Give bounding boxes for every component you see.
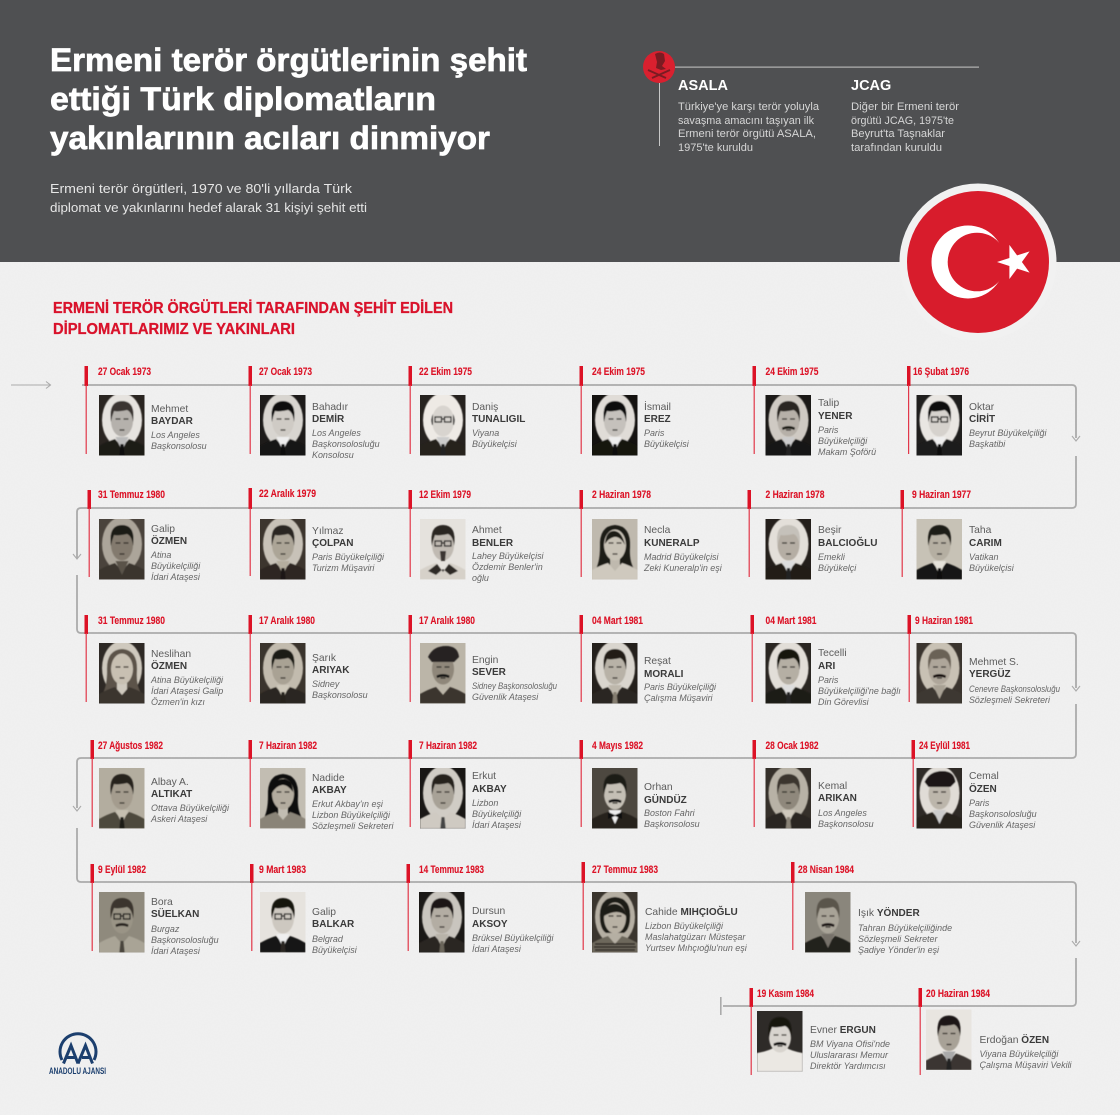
entry: Orhan Gündüz: 4 Mayıs 1982 — [592, 740, 643, 752]
entry: Galip Balkar: 9 Mart 1983 — [259, 864, 306, 876]
entry: Şarık Arıyak: Başkonsolosu — [312, 690, 368, 700]
entry: Erdoğan Özen: Viyana Büyükelçiliği — [980, 1049, 1059, 1059]
entry: Dursun Aksoy — [406, 864, 554, 954]
entry: Orhan Gündüz — [580, 740, 700, 829]
photo: Evner Ergun — [757, 1011, 802, 1072]
entry: Albay A. Altıkat: ALTIKAT — [151, 789, 192, 800]
entry: Işık Yönder: Işık YÖNDER — [858, 906, 920, 919]
entry: Talip Yener: Büyükelçiliği — [818, 436, 868, 446]
title: Ermeni terör örgütlerinin şehit — [50, 42, 527, 78]
entry: Engin Sever: Engin — [472, 655, 499, 666]
entry: Ahmet Benler: Lahey Büyükelçisi — [472, 551, 545, 561]
entry: Işık Yönder: 28 Nisan 1984 — [798, 864, 855, 876]
text: JCAG: tarafından kuruldu — [851, 142, 942, 154]
entry: Erkut Akbay: Lizbon — [472, 798, 498, 808]
entry: Taha Carım: CARIM — [969, 538, 1002, 549]
entry: Necla Kuneralp — [580, 489, 723, 580]
entry: Bora Süelkan: 9 Eylül 1982 — [98, 864, 146, 876]
icon: ASALA emblem — [643, 51, 675, 83]
entry: Talip Yener: Makam Şoförü — [818, 447, 876, 457]
entry: Dursun Aksoy: İdari Ataşesi — [472, 944, 522, 954]
heading: section title: DİPLOMATLARIMIZ VE YAKINLARI — [53, 320, 295, 338]
entry: Taha Carım — [900, 489, 1015, 580]
entry: Yılmaz Çolpan: Yılmaz — [312, 526, 343, 537]
entry: Galip Balkar: Galip — [312, 907, 336, 918]
text: ASALA: 1975'te kuruldu — [678, 142, 753, 154]
photo: Ahmet Benler — [420, 519, 466, 580]
entry: Erdoğan Özen: Erdoğan ÖZEN — [980, 1033, 1049, 1046]
entry: Mehmet S. Yergüz: Sözleşmeli Sekreteri — [969, 695, 1051, 705]
photo: Erkut Akbay — [420, 766, 466, 828]
photo: Dursun Aksoy — [419, 890, 464, 952]
photo: Bahadır Demir — [260, 393, 306, 456]
entry: Mehmet S. Yergüz: 9 Haziran 1981 — [915, 615, 973, 627]
subtitle — [50, 181, 367, 215]
photo: İsmail Erez — [592, 393, 638, 456]
entry: Cahide Mıhçıoğlu — [582, 862, 748, 953]
entry: Cahide Mıhçıoğlu: Yurtsev Mıhçıoğlu'nun eşi — [645, 943, 748, 953]
text: ASALA: Ermeni terör örgütü ASALA, — [678, 128, 816, 140]
entry: Mehmet S. Yergüz: YERGÜZ — [969, 667, 1011, 680]
entry: Neslihan Özmen: 31 Temmuz 1980 — [98, 615, 165, 627]
entry: Engin Sever — [408, 615, 557, 704]
entry: Bora Süelkan: Bora — [151, 897, 173, 908]
entry: Nadide Akbay: Sözleşmeli Sekreteri — [312, 821, 394, 831]
entry: Albay A. Altıkat: Askeri Ataşesi — [150, 814, 208, 824]
entry: Oktar Cirit: Başkatibi — [969, 439, 1006, 449]
entry: Ahmet Benler: 12 Ekim 1979 — [419, 489, 471, 501]
photo: Yılmaz Çolpan — [260, 517, 306, 580]
entry: Albay A. Altıkat: Ottava Büyükelçiliği — [151, 803, 230, 813]
timeline connector path — [73, 385, 1080, 1015]
title: yakınlarının acıları dinmiyor — [50, 120, 490, 156]
entry: Galip Balkar: Belgrad — [312, 934, 344, 944]
entry: Evner Ergun: Evner ERGUN — [810, 1025, 876, 1036]
entry: Kemal Arıkan: Kemal — [818, 781, 847, 792]
entry: Cemal Özen: ÖZEN — [969, 782, 997, 795]
photo: Nadide Akbay — [260, 768, 306, 828]
photo: Talip Yener — [766, 393, 811, 456]
entry: Necla Kuneralp: Necla — [644, 525, 671, 536]
entry: Neslihan Özmen: Neslihan — [151, 649, 191, 660]
entry: Engin Sever: 17 Aralık 1980 — [419, 615, 475, 627]
entry: Galip Balkar: BALKAR — [312, 919, 355, 930]
icon: Turkish flag badge — [900, 184, 1056, 340]
entry: Erdoğan Özen — [918, 988, 1073, 1075]
entry: Daniş Tunalıgil: Viyana — [472, 428, 499, 438]
entry: Nadide Akbay: AKBAY — [312, 785, 347, 796]
photo: Cahide Mıhçıoğlu — [592, 890, 638, 952]
entry: Ahmet Benler: Ahmet — [472, 525, 502, 536]
entry: Nadide Akbay: Erkut Akbay'ın eşi — [312, 799, 384, 809]
photo: Orhan Gündüz — [592, 768, 638, 828]
entry: Oktar Cirit: 16 Şubat 1976 — [913, 366, 969, 378]
entry: Yılmaz Çolpan: 22 Aralık 1979 — [259, 488, 316, 500]
entry: Neslihan Özmen: ÖZMEN — [151, 659, 187, 672]
photo: Galip Balkar — [260, 892, 306, 952]
entry: Evner Ergun: BM Viyana Ofisi'nde — [810, 1039, 890, 1049]
entry: Oktar Cirit: Oktar — [969, 402, 995, 413]
entry: Necla Kuneralp: 2 Haziran 1978 — [592, 489, 651, 501]
arrow: timeline start — [11, 382, 50, 388]
entry: İsmail Erez: EREZ — [644, 414, 671, 425]
entry: Tecelli Arı: Büyükelçiliği'ne bağlı — [818, 686, 901, 696]
entry: Galip Özmen: Atina — [150, 550, 171, 560]
text: JCAG: örgütü JCAG, 1975'te — [851, 115, 954, 127]
entry: Ahmet Benler: BENLER — [472, 538, 514, 549]
entry: Yılmaz Çolpan: ÇOLPAN — [312, 538, 353, 549]
subtitle: diplomat ve yakınlarını hedef alarak 31 kişiyi şehit etti — [50, 200, 367, 215]
entry: Galip Özmen — [88, 489, 201, 582]
entry: Bora Süelkan: İdari Ataşesi — [151, 946, 201, 956]
entry: İsmail Erez: 24 Ekim 1975 — [592, 366, 645, 378]
entry: Galip Özmen: Galip — [151, 524, 175, 535]
entry: Cemal Özen: Güvenlik Ataşesi — [969, 820, 1036, 830]
entry: Reşat Moralı: Paris Büyükelçiliği — [644, 682, 717, 692]
entry: Daniş Tunalıgil — [408, 366, 525, 456]
entry: Talip Yener: 24 Ekim 1975 — [766, 366, 818, 378]
entry: İsmail Erez — [580, 366, 690, 456]
entry: Cahide Mıhçıoğlu: 27 Temmuz 1983 — [592, 864, 658, 876]
entry: Nadide Akbay: Lizbon Büyükelçiliği — [312, 810, 391, 820]
entry: Beşir Balcıoğlu — [748, 489, 877, 580]
entry: Engin Sever: SEVER — [472, 667, 507, 678]
photo: Mehmet Baydar — [99, 393, 144, 456]
entry: İsmail Erez: İsmail — [644, 400, 671, 413]
entry: Dursun Aksoy: 14 Temmuz 1983 — [419, 864, 484, 876]
text: JCAG: JCAG — [851, 78, 891, 94]
entry: Daniş Tunalıgil: 22 Ekim 1975 — [419, 366, 472, 378]
entry: Daniş Tunalıgil: Daniş — [472, 402, 498, 413]
entry: Talip Yener — [752, 366, 876, 457]
entry: Neslihan Özmen: Atina Büyükelçiliği — [150, 675, 224, 685]
entry: Talip Yener: Paris — [818, 425, 839, 435]
entry: Talip Yener: Talip — [818, 398, 839, 409]
entry: Oktar Cirit — [907, 366, 1048, 456]
entry: Cahide Mıhçıoğlu: Maslahatgüzarı Müsteşar — [645, 932, 746, 942]
subtitle: Ermeni terör örgütleri, 1970 ve 80'li yıllarda Türk — [50, 181, 353, 196]
entry: Erkut Akbay: 7 Haziran 1982 — [419, 740, 477, 752]
entry: Beşir Balcıoğlu: BALCIOĞLU — [818, 536, 877, 549]
entry: Taha Carım: Büyükelçisi — [969, 563, 1015, 573]
entry: Galip Balkar: Büyükelçisi — [312, 945, 358, 955]
entry: Işık Yönder — [791, 862, 952, 955]
entry: Mehmet Baydar: 27 Ocak 1973 — [98, 366, 151, 378]
entry: Albay A. Altıkat: 27 Ağustos 1982 — [98, 740, 163, 752]
entry: Daniş Tunalıgil: TUNALIGIL — [472, 414, 525, 425]
photo: Oktar Cirit — [916, 393, 962, 456]
entry: Dursun Aksoy: Dursun — [472, 906, 505, 917]
entry: İsmail Erez: Paris — [644, 428, 665, 438]
entry: Oktar Cirit: CİRİT — [969, 412, 995, 425]
photo: Kemal Arıkan — [766, 766, 811, 828]
entry: Mehmet S. Yergüz — [908, 615, 1060, 705]
entry: Oktar Cirit: Beyrut Büyükelçiliği — [969, 428, 1048, 438]
logo: Anadolu Ajansı — [49, 1034, 106, 1076]
entry: Işık Yönder: Şadiye Yönder'in eşi — [858, 945, 940, 955]
photo: Erdoğan Özen — [926, 1010, 972, 1070]
entry: Albay A. Altıkat: Albay A. — [151, 777, 189, 788]
entry: Reşat Moralı: Çalışma Müşaviri — [644, 693, 714, 703]
entry: Kemal Arıkan: Başkonsolosu — [818, 819, 874, 829]
entry: Tecelli Arı: ARI — [818, 661, 835, 672]
entry: Neslihan Özmen — [84, 615, 224, 707]
entry: Kemal Arıkan: Los Angeles — [818, 808, 867, 818]
entry: Kemal Arıkan: 28 Ocak 1982 — [766, 740, 818, 752]
entry: Bahadır Demir: Los Angeles — [312, 428, 361, 438]
entry: Bahadır Demir: 27 Ocak 1973 — [259, 366, 312, 378]
entry: Galip Balkar — [250, 864, 358, 955]
photo: Taha Carım — [916, 519, 962, 580]
entry: Mehmet Baydar: Mehmet — [151, 404, 188, 415]
entry: Ahmet Benler: Özdemir Benler'in — [472, 562, 543, 572]
entry: Şarık Arıyak — [248, 615, 368, 704]
entry: Cemal Özen: Cemal — [969, 771, 999, 782]
entry: Şarık Arıyak: 17 Aralık 1980 — [259, 615, 315, 627]
entry: Galip Özmen: ÖZMEN — [151, 534, 187, 547]
photo: Daniş Tunalıgil — [420, 393, 466, 456]
entry: Erkut Akbay: Büyükelçiliği — [472, 809, 522, 819]
entry: Cemal Özen: Paris — [969, 798, 990, 808]
entry: Erdoğan Özen: Çalışma Müşaviri Vekili — [980, 1060, 1073, 1070]
entry: Cemal Özen — [912, 740, 1037, 830]
entry: Şarık Arıyak: Şarık — [312, 653, 337, 664]
entry: Bahadır Demir: Konsolosu — [312, 450, 354, 460]
entry: Yılmaz Çolpan — [248, 488, 385, 580]
entry: Işık Yönder: Tahran Büyükelçiliğinde — [858, 923, 952, 933]
entry: Tecelli Arı: Paris — [818, 675, 839, 685]
entry: Reşat Moralı: MORALI — [644, 669, 684, 680]
entry: Bora Süelkan: SÜELKAN — [151, 907, 199, 920]
entry: Bahadır Demir: Başkonsolosluğu — [312, 439, 380, 449]
entry: Taha Carım: Vatikan — [969, 552, 999, 562]
entry: Evner Ergun: Uluslararası Memur — [810, 1050, 889, 1060]
photo: Engin Sever — [420, 643, 466, 704]
entry: Bora Süelkan: Başkonsolosluğu — [151, 935, 219, 945]
entry: Necla Kuneralp: KUNERALP — [644, 538, 700, 549]
entry: Talip Yener: YENER — [818, 411, 853, 422]
entry: Cahide Mıhçıoğlu: Cahide MIHÇIOĞLU — [645, 905, 738, 918]
entry: Yılmaz Çolpan: Paris Büyükelçiliği — [312, 552, 385, 562]
title: ettiği Türk diplomatların — [50, 81, 436, 117]
entry: Şarık Arıyak: ARIYAK — [312, 665, 350, 676]
entry: Bora Süelkan: Burgaz — [151, 924, 180, 934]
entry: Dursun Aksoy: AKSOY — [472, 919, 508, 930]
panel: ASALA and JCAG info — [643, 51, 979, 154]
photo: Albay A. Altıkat — [99, 768, 144, 828]
text: ASALA: savaşma amacını taşıyan ilk — [678, 115, 814, 127]
text: JCAG — [851, 78, 959, 154]
entry: Orhan Gündüz: Başkonsolosu — [644, 819, 700, 829]
entry: Bahadır Demir: Bahadır — [312, 402, 349, 413]
entry: Engin Sever: Güvenlik Ataşesi — [472, 692, 539, 702]
entry: Cemal Özen: Başkonsolosluğu — [969, 809, 1037, 819]
entry: Neslihan Özmen: İdari Ataşesi Galip — [151, 686, 223, 696]
entry: Erkut Akbay: AKBAY — [472, 784, 507, 795]
entry: Nadide Akbay: Nadide — [312, 773, 345, 784]
entry: Cemal Özen: 24 Eylül 1981 — [919, 740, 970, 752]
entry: Taha Carım: 9 Haziran 1977 — [912, 489, 971, 501]
entry: Neslihan Özmen: Özmen'in kızı — [151, 697, 205, 707]
entry: Albay A. Altıkat — [90, 740, 230, 828]
entry: Mehmet Baydar: Başkonsolosu — [151, 441, 207, 451]
entry: Orhan Gündüz: Orhan — [644, 782, 673, 793]
entry: Galip Özmen: 31 Temmuz 1980 — [98, 489, 165, 501]
entry: Kemal Arıkan: ARIKAN — [818, 793, 857, 804]
text: ASALA: ASALA — [678, 78, 728, 94]
entry: Galip Özmen: Büyükelçiliği — [151, 561, 201, 571]
entry: Nadide Akbay — [248, 740, 394, 831]
entry: Erkut Akbay — [408, 740, 522, 830]
entry: Orhan Gündüz: Boston Fahri — [644, 808, 696, 818]
entry: Bahadır Demir — [248, 366, 380, 460]
photo: Bora Süelkan — [99, 892, 144, 952]
entry: Ahmet Benler — [408, 489, 545, 583]
entry: Mehmet S. Yergüz: Mehmet S. — [969, 657, 1019, 668]
photo: Beşir Balcıoğlu — [766, 517, 811, 580]
entry: Bora Süelkan — [90, 864, 219, 956]
header band — [0, 0, 1120, 262]
photo: Tecelli Arı — [766, 641, 811, 704]
entry: Galip Özmen: İdari Ataşesi — [151, 572, 201, 582]
entry: Taha Carım: Taha — [969, 525, 992, 536]
entry: Necla Kuneralp: Madrid Büyükelçisi — [644, 552, 720, 562]
entry: Ahmet Benler: oğlu — [472, 573, 489, 583]
photo: Şarık Arıyak — [260, 641, 306, 704]
entry: Erkut Akbay: Erkut — [472, 771, 496, 782]
entry: Erkut Akbay: İdari Ataşesi — [472, 820, 522, 830]
entry: Tecelli Arı — [750, 615, 901, 707]
entry: Mehmet S. Yergüz: Cenevre Başkonsolosluğu — [969, 684, 1060, 694]
entry: Beşir Balcıoğlu: Emekli — [818, 552, 846, 562]
entry: İsmail Erez: Büyükelçisi — [644, 439, 690, 449]
entry: Mehmet Baydar: BAYDAR — [151, 416, 194, 427]
entry: Dursun Aksoy: Brüksel Büyükelçiliği — [472, 933, 554, 943]
logo: Anadolu Ajansı: ANADOLU AJANSI — [49, 1066, 106, 1076]
photo: Işık Yönder — [805, 892, 850, 952]
entry: Beşir Balcıoğlu: Büyükelçi — [818, 563, 857, 573]
entry: Beşir Balcıoğlu: 2 Haziran 1978 — [766, 489, 824, 501]
entry: Şarık Arıyak: Sidney — [312, 679, 340, 689]
photo: Neslihan Özmen — [99, 641, 144, 704]
photo: Mehmet S. Yergüz — [916, 641, 962, 704]
entry: Evner Ergun: 19 Kasım 1984 — [757, 988, 815, 1000]
entry: Engin Sever: Sidney Başkonsolosluğu — [472, 681, 557, 691]
entry: Işık Yönder: Sözleşmeli Sekreter — [858, 934, 938, 944]
photo: Reşat Moralı — [592, 641, 638, 704]
photo: Cemal Özen — [916, 766, 962, 828]
entry: Yılmaz Çolpan: Turizm Müşaviri — [312, 563, 375, 573]
text: JCAG: Diğer bir Ermeni terör — [851, 101, 959, 113]
text: ASALA — [678, 78, 820, 154]
entry: Necla Kuneralp: Zeki Kuneralp'in eşi — [643, 563, 723, 573]
entry: Tecelli Arı: Din Görevlisi — [818, 697, 870, 707]
entry: Orhan Gündüz: GÜNDÜZ — [644, 793, 687, 806]
entry: Beşir Balcıoğlu: Beşir — [818, 525, 842, 536]
title — [50, 42, 527, 156]
entry: Kemal Arıkan — [752, 740, 874, 829]
entry: Reşat Moralı: Reşat — [644, 656, 671, 667]
heading: section title: ERMENİ TERÖR ÖRGÜTLERİ TARAFINDAN ŞEHİT EDİLEN — [53, 298, 453, 317]
entry: Tecelli Arı: 04 Mart 1981 — [766, 615, 816, 627]
entry: Reşat Moralı: 04 Mart 1981 — [592, 615, 643, 627]
entry: Evner Ergun: Direktör Yardımcısı — [810, 1061, 886, 1071]
text: JCAG: Beyrut'ta Taşnaklar — [851, 128, 945, 140]
entry: Tecelli Arı: Tecelli — [818, 648, 847, 659]
entry: Evner Ergun — [750, 988, 890, 1075]
entry: Reşat Moralı — [580, 615, 717, 704]
entry: Nadide Akbay: 7 Haziran 1982 — [259, 740, 317, 752]
entry: Erdoğan Özen: 20 Haziran 1984 — [926, 988, 991, 1000]
entry: Mehmet Baydar: Los Angeles — [151, 430, 200, 440]
entry: Bahadır Demir: DEMİR — [312, 412, 345, 425]
text: ASALA: Türkiye'ye karşı terör yoluyla — [678, 101, 820, 113]
entry: Mehmet Baydar — [84, 366, 207, 456]
heading: section title — [53, 298, 453, 338]
entry: Cahide Mıhçıoğlu: Lizbon Büyükelçiliği — [645, 921, 724, 931]
photo: Galip Özmen — [99, 517, 144, 580]
photo: Necla Kuneralp — [592, 519, 638, 580]
entry: Daniş Tunalıgil: Büyükelçisi — [472, 439, 518, 449]
